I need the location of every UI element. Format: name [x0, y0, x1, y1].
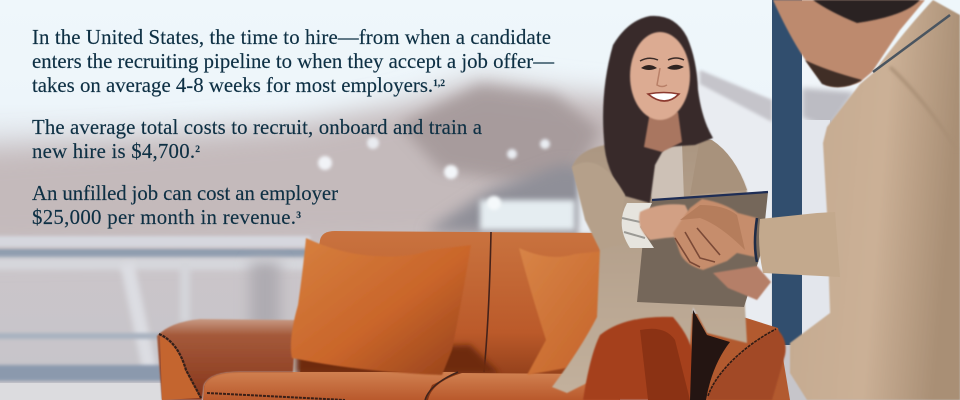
blazer sleeve [572, 162, 627, 250]
man's head [773, 0, 925, 87]
paragraph: cost of new hire: The average total costs to recruit, onboard and train a [32, 116, 482, 139]
eyes [641, 65, 684, 70]
forearm [639, 204, 700, 240]
paragraph: unfilled job cost [32, 182, 338, 229]
paragraph: cost of new hire: new hire is $4,700. [32, 140, 195, 163]
paragraph: time to hire: takes on average 4-8 weeks for most employers. [32, 74, 433, 97]
paragraph: unfilled job cost: 3 [296, 211, 301, 221]
paragraph: time to hire: enters the recruiting pipeline to when they accept a job offer— [32, 50, 554, 73]
man's jacket [755, 0, 960, 400]
man's sleeve [759, 212, 840, 277]
paragraph: time to hire [32, 26, 554, 97]
trousers [583, 317, 693, 400]
face [630, 32, 690, 120]
paragraph: cost of new hire: 2 [195, 145, 200, 155]
woman figure [552, 16, 771, 400]
paragraph: unfilled job cost: An unfilled job can cost an employer [32, 182, 338, 205]
left orange pillow [291, 238, 471, 375]
woman's fingers and man's hand in a handshake [673, 199, 757, 270]
paragraph: time to hire: 1,2 [433, 79, 445, 89]
hair [603, 16, 713, 203]
lower hand [713, 266, 771, 300]
statistics text [32, 26, 554, 229]
paragraph: time to hire: In the United States, the time to hire—from when a candidate [32, 26, 551, 49]
paragraph: cost of new hire [32, 116, 482, 163]
neck [644, 112, 682, 152]
right orange pillow [519, 248, 612, 375]
folder [637, 192, 768, 307]
paragraph: unfilled job cost: $25,000 per month in revenue. [32, 206, 296, 229]
blazer [552, 140, 747, 393]
window pillar [772, 0, 802, 345]
striped cuff [622, 203, 654, 248]
t-shirt [642, 143, 684, 200]
smile [648, 92, 679, 101]
orange leather sofa [157, 231, 790, 400]
